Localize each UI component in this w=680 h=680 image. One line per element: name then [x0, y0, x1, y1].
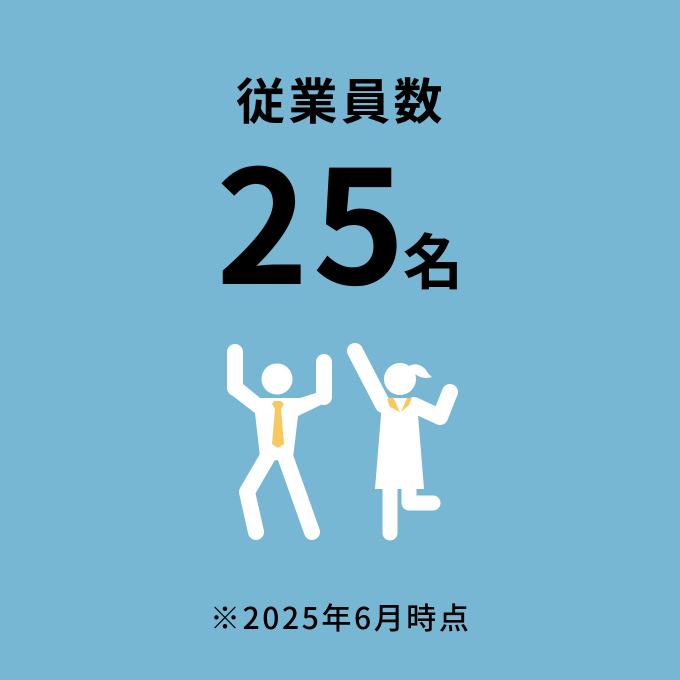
title: 従業員数	[236, 63, 446, 134]
icon: cheering man	[227, 352, 331, 532]
headline number: 25 employees: 名	[403, 215, 463, 302]
icon: cheering woman	[355, 351, 450, 533]
icon: yellow necktie	[272, 401, 284, 448]
icon: yellow collar	[387, 397, 412, 412]
headline number: 25 employees: 25	[216, 103, 409, 330]
footnote: ※2025年6月時点	[210, 594, 472, 638]
